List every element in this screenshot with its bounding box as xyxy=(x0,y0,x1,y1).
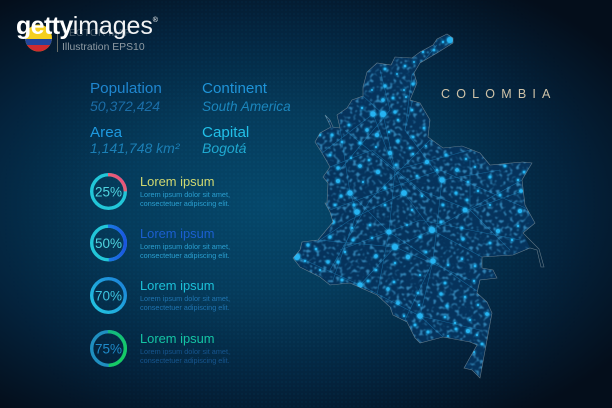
facts: area: 1,141,748 km² xyxy=(90,140,181,156)
item 25%: consectetuer adipiscing elit. xyxy=(140,199,230,208)
item 50%: Lorem ipsum xyxy=(140,226,215,241)
item 70%: 70% xyxy=(95,288,122,304)
flag icon xyxy=(25,24,52,52)
facts: population: 50,372,424 xyxy=(90,98,160,114)
subtitle: VECTOR MAP xyxy=(62,27,131,39)
item 50%: Lorem ipsum dolor sit amet, xyxy=(140,242,230,251)
item 50%: consectetuer adipiscing elit. xyxy=(140,251,230,260)
facts: continent xyxy=(202,80,291,114)
item 70%: consectetuer adipiscing elit. xyxy=(140,303,230,312)
facts: population xyxy=(90,80,162,114)
item 75%: consectetuer adipiscing elit. xyxy=(140,356,230,365)
item 50%: 50% xyxy=(95,236,122,251)
facts: area xyxy=(90,124,181,156)
facts: capital: Bogotá xyxy=(202,140,247,156)
item 25%: Lorem ipsum dolor sit amet, xyxy=(140,190,230,199)
item 70%: Lorem ipsum dolor sit amet, xyxy=(140,294,230,303)
item 75%: 75% xyxy=(95,342,122,356)
watermark: gettyimages xyxy=(16,12,153,40)
facts: capital: Capital xyxy=(202,124,249,141)
country name: COLOMBIA xyxy=(441,87,557,101)
item 25%: 25% xyxy=(95,184,122,200)
item 75%: Lorem ipsum dolor sit amet, xyxy=(140,347,230,356)
item 75% xyxy=(92,331,230,365)
facts: population: Population xyxy=(90,80,162,97)
subtitle xyxy=(57,27,145,53)
item 25%: Lorem ipsum xyxy=(140,174,215,189)
map outline xyxy=(293,34,544,378)
item 75%: Lorem ipsum xyxy=(140,331,215,346)
facts: continent: Continent xyxy=(202,80,268,97)
item 70% xyxy=(92,278,230,312)
item 25% xyxy=(92,174,230,208)
facts: capital xyxy=(202,124,249,156)
city lights xyxy=(294,37,525,353)
facts: continent: South America xyxy=(202,99,291,114)
item 70%: Lorem ipsum xyxy=(140,278,215,293)
item 50% xyxy=(92,226,230,260)
facts: area: Area xyxy=(90,124,123,141)
map of Colombia xyxy=(285,25,550,385)
subtitle: Illustration EPS10 xyxy=(62,42,145,53)
network lines xyxy=(300,45,530,337)
watermark: ® xyxy=(153,16,159,24)
